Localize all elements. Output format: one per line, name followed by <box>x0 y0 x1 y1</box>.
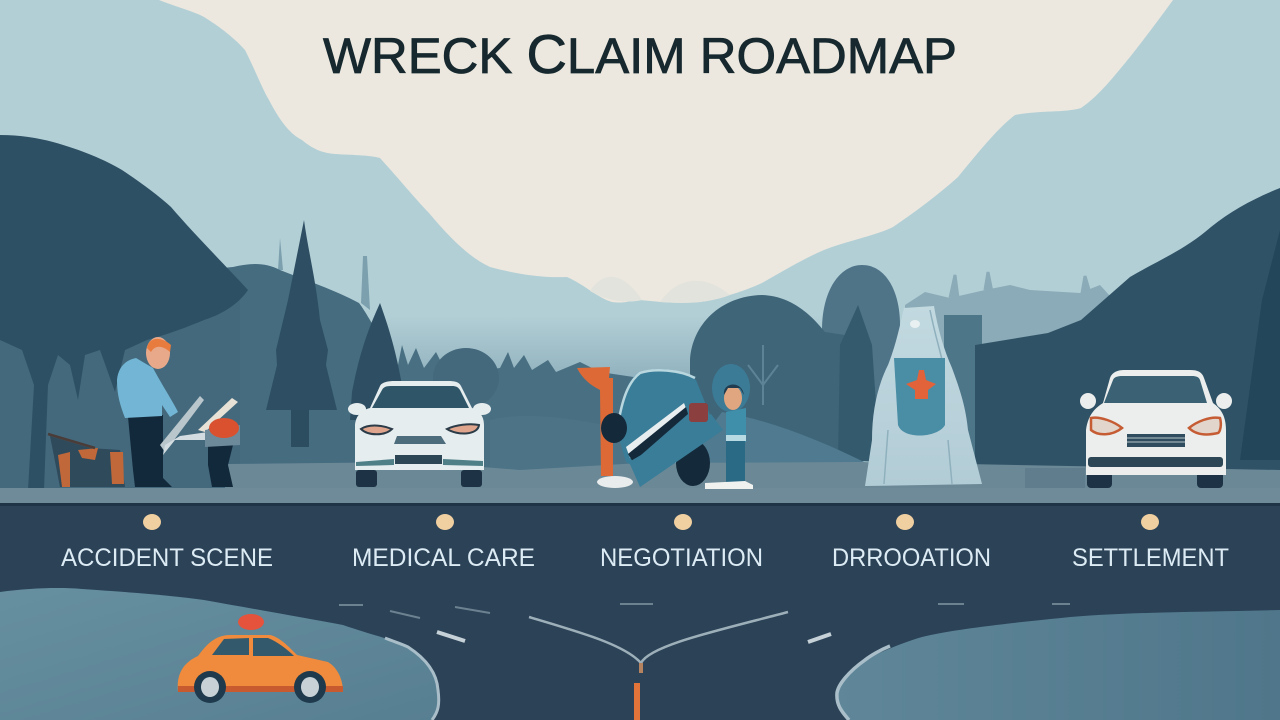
road markings <box>339 604 1070 720</box>
step: settlement: SETTLEMENT <box>1072 544 1229 572</box>
round tree <box>822 265 900 460</box>
cream sky panel <box>159 0 1173 303</box>
step: negotiation: NEGOTIATION <box>600 544 763 572</box>
dark mountain right with forest <box>975 188 1280 470</box>
step: medical care <box>352 514 535 572</box>
icon: man in blue shirt <box>117 337 178 487</box>
step: drrooation <box>832 514 991 572</box>
forest base left <box>0 300 240 490</box>
icon: orange post <box>577 367 633 488</box>
roadside strip <box>0 488 1280 504</box>
step: settlement <box>1072 514 1229 572</box>
icon: kneeling person <box>205 418 240 487</box>
icon: overturned car <box>601 369 723 487</box>
icon: person in blue hood <box>705 364 753 489</box>
dark road <box>0 503 1280 720</box>
right island <box>837 610 1280 720</box>
icon: medical badge <box>894 358 945 436</box>
icon: wreckage pile <box>48 434 125 487</box>
slope behind bottle <box>680 412 870 468</box>
step: accident scene <box>61 514 273 572</box>
mid hill left <box>160 264 420 470</box>
icon: white car left <box>348 381 491 487</box>
step: negotiation <box>600 514 763 572</box>
small pine tree <box>350 303 402 420</box>
icon: medical shield monument <box>865 306 982 486</box>
title: WRECK CLAIM ROADMAP <box>323 23 957 85</box>
step: accident scene: ACCIDENT SCENE <box>61 544 273 572</box>
tree line and bushes centre <box>395 345 640 470</box>
icon: orange car with beacon <box>178 614 343 703</box>
icon: open papers <box>160 396 238 455</box>
icon: white car right <box>1080 370 1232 488</box>
left island <box>0 588 439 720</box>
dome tree <box>690 295 880 465</box>
dark hill left with hanging forest <box>0 135 248 490</box>
midground road verge <box>225 462 1280 490</box>
right building <box>944 315 982 465</box>
step: drrooation: DRROOATION <box>832 544 991 572</box>
distant mountains <box>278 238 1120 420</box>
icon: orange cross star <box>906 370 936 399</box>
tall pine tree <box>266 220 337 447</box>
step: medical care: MEDICAL CARE <box>352 544 535 572</box>
